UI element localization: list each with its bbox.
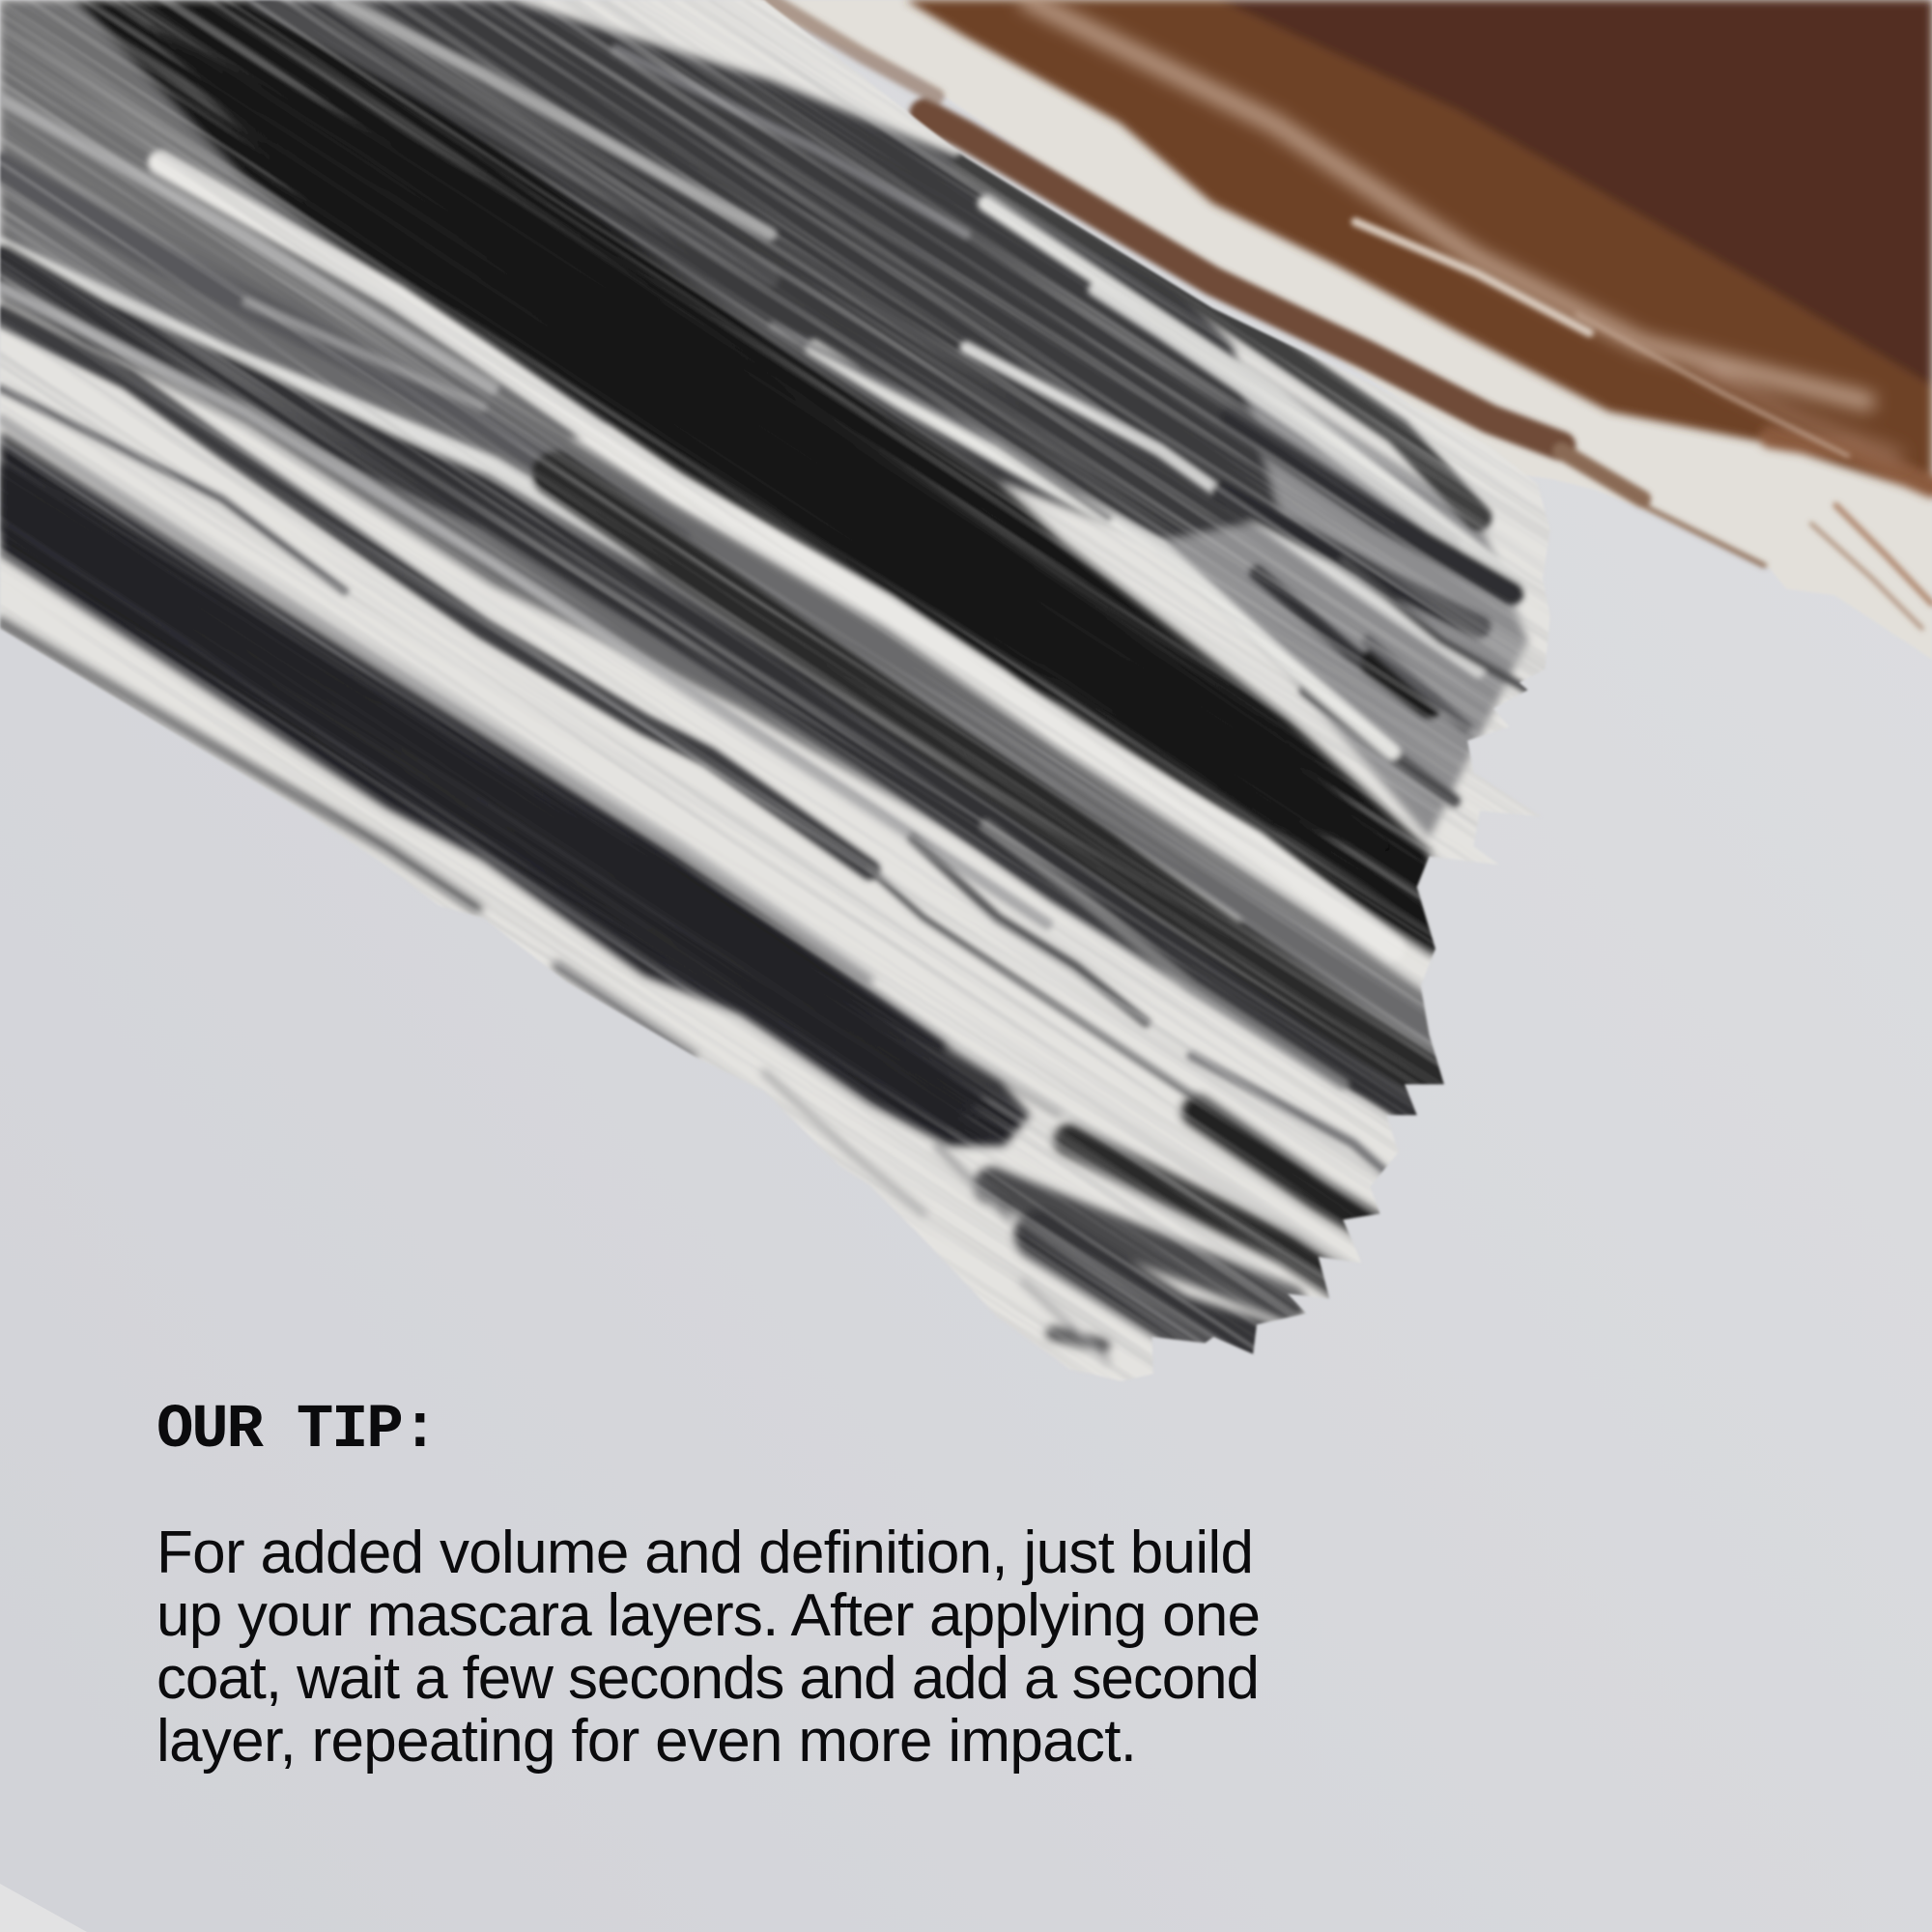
upper right grey underlay [1159,357,1528,838]
solid black core [148,25,1392,850]
black mascara swatch [0,0,1548,1380]
body text: up your mascara layers. After applying one [156,1582,1261,1649]
lower grey edge [0,622,477,908]
heading: OUR TIP: [156,1396,439,1465]
fine streak texture [0,0,1549,1379]
swatch base [0,0,1552,1392]
body text: layer, repeating for even more impact. [156,1708,1137,1775]
white band below black [160,162,1392,949]
lower black band [0,431,1030,1146]
solid lower band core [0,462,985,1127]
body text: For added volume and definition, just build [156,1520,1254,1586]
corner paper fold [0,1884,87,1932]
left grey area [0,0,616,458]
mid grey underlay [0,160,1444,1091]
brown mascara swatch [739,0,1932,659]
body text: coat, wait a few seconds and add a second [156,1645,1260,1712]
main black band [74,0,1444,955]
illustration: mascara swatches [0,0,1932,1380]
stripes below black [0,99,493,388]
body text [156,1520,1261,1775]
tail dark patches [1069,1140,1355,1293]
brown speck [1517,491,1534,502]
upper dark band [259,0,1282,542]
